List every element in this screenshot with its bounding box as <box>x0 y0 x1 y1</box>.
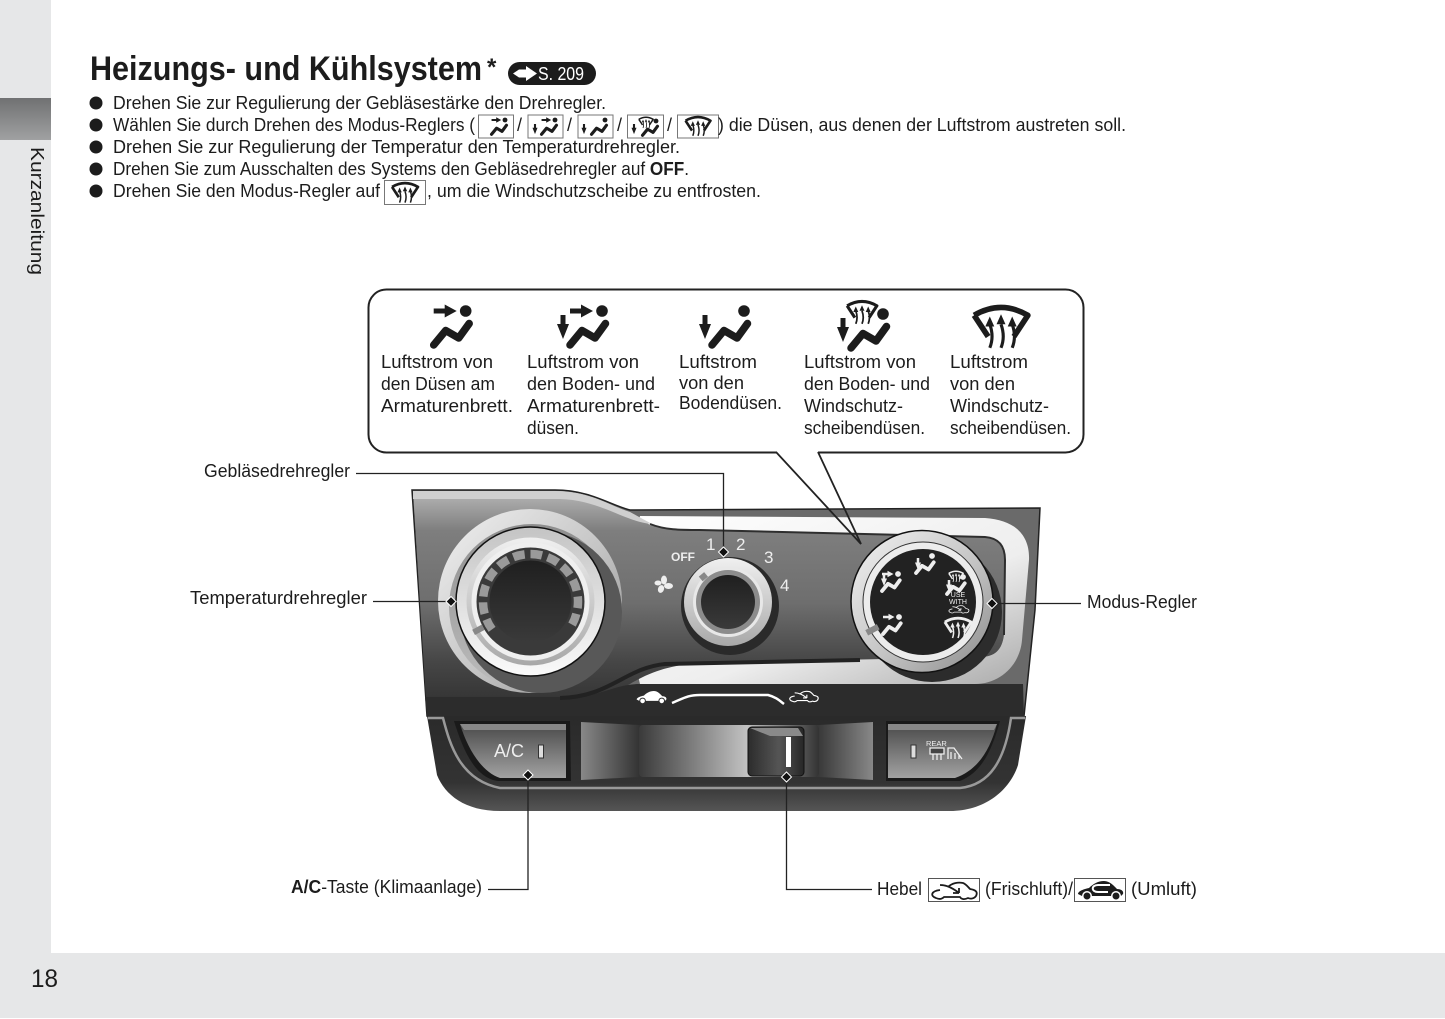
panel body <box>412 490 1040 716</box>
label: temperature dial <box>190 588 456 608</box>
mode text 5: scheibendüsen. <box>950 418 1071 438</box>
mode text 3: von den <box>679 373 744 393</box>
bullet list: Wählen Sie durch Drehen des Modus-Reglers ( <box>113 115 475 135</box>
mode text 5: Windschutz- <box>950 396 1049 416</box>
top left highlight <box>413 491 652 524</box>
bottom band <box>0 953 1445 1018</box>
mode text 4: Luftstrom von <box>804 352 916 372</box>
mode text 4: Windschutz- <box>804 396 903 416</box>
small icon: defrost <box>678 115 718 138</box>
mode icon: floor and dashboard <box>557 304 608 345</box>
page reference pill <box>508 62 596 85</box>
blower speed labels: OFF <box>671 550 695 564</box>
title: * <box>487 54 497 81</box>
white trim strip <box>620 516 1029 684</box>
mode text 2 <box>527 352 660 438</box>
blower speed labels: 2 <box>736 535 745 554</box>
blower speed labels <box>671 535 789 595</box>
dial icons <box>881 553 971 638</box>
mode text 4: den Boden- und <box>804 374 930 394</box>
callout tail <box>776 450 861 544</box>
mode text 4 <box>804 352 930 438</box>
bullet list: / <box>567 115 572 135</box>
dial icons: USE <box>951 592 966 599</box>
bullet list: Drehen Sie den Modus-Regler auf <box>113 181 381 201</box>
icon: fresh air <box>928 878 980 902</box>
label: temperature dial: Temperaturdrehregler <box>190 588 367 608</box>
mode text 4: scheibendüsen. <box>804 418 925 438</box>
label: mode dial <box>987 592 1197 612</box>
mode icon: dashboard <box>434 304 472 345</box>
small icon: floor and windshield vents <box>628 115 664 138</box>
A/C button <box>454 721 571 781</box>
left sidebar <box>0 0 51 1018</box>
blower speed labels: 4 <box>780 576 789 595</box>
rear defrost button: REAR <box>926 739 947 748</box>
blower speed labels: 3 <box>764 548 773 567</box>
bullet list: ) die Düsen, aus denen der Luftstrom austreten soll. <box>718 115 1126 135</box>
title: Heizungs- und Kühlsystem <box>90 50 482 88</box>
label: blower dial: Gebläsedrehregler <box>204 461 350 481</box>
sidebar label: Kurzanleitung <box>27 147 47 275</box>
mode text 5 <box>950 352 1071 438</box>
label: A/C button <box>291 770 533 897</box>
mode text 1: Armaturenbrett. <box>381 396 513 416</box>
A/C button: A/C <box>494 741 524 761</box>
air source scale <box>637 691 818 704</box>
label: A/C button: A/C-Taste (Klimaanlage) <box>291 877 482 897</box>
recess top edge <box>650 524 1005 635</box>
icon: recirculated air <box>1074 878 1126 902</box>
bullet list: Drehen Sie zur Regulierung der Temperatur den Temperaturdrehregler. <box>113 137 680 157</box>
mode icon: windshield <box>974 307 1028 348</box>
mode text 5: Luftstrom <box>950 352 1028 372</box>
mode text 1: Luftstrom von <box>381 352 493 372</box>
mode icon: floor <box>699 305 750 345</box>
mode text 3: Luftstrom <box>679 352 757 372</box>
climate control panel <box>412 490 1040 811</box>
bullet list: Drehen Sie zur Regulierung der Gebläsestärke den Drehregler. <box>113 93 606 113</box>
mode text 1 <box>381 352 513 416</box>
bullet list <box>90 93 1126 204</box>
label: air source lever: (Umluft) <box>1131 879 1197 899</box>
callout panel: airflow modes <box>368 290 1084 452</box>
bullet list: Drehen Sie zum Ausschalten des Systems den Gebläsedrehregler auf OFF. <box>113 159 689 179</box>
small icon: defrost inline <box>384 180 426 204</box>
label: mode dial: Modus-Regler <box>1087 592 1197 612</box>
label: air source lever <box>782 772 1197 902</box>
mode text 2: Luftstrom von <box>527 352 639 372</box>
air source lever <box>581 722 873 780</box>
blower dial <box>681 557 779 655</box>
bullet list: / <box>667 115 672 135</box>
mode text 2: Armaturenbrett- <box>527 396 660 416</box>
sidebar tab <box>0 98 51 140</box>
rear defrost button <box>886 721 1000 781</box>
fan icon <box>654 576 673 594</box>
bullet list: / <box>617 115 622 135</box>
small icon: floor vents <box>578 115 613 138</box>
bullet list: , um die Windschutzscheibe zu entfrosten. <box>427 181 761 201</box>
mode text 3 <box>679 352 782 413</box>
small icon: dashboard vents <box>478 115 514 138</box>
mode text 3: Bodendüsen. <box>679 393 782 413</box>
temperature dial <box>438 509 623 699</box>
mode icon: floor and windshield <box>837 301 889 348</box>
page number: 18 <box>31 965 58 993</box>
small icon: floor and dashboard vents <box>528 115 563 138</box>
label: air source lever: Hebel <box>877 879 922 899</box>
mode text 5: von den <box>950 374 1015 394</box>
bullet list: / <box>517 115 522 135</box>
label: air source lever: (Frischluft)/ <box>985 879 1073 899</box>
mode text 1: den Düsen am <box>381 374 495 394</box>
control face <box>413 491 1005 699</box>
lower panel <box>427 716 1026 811</box>
blower speed labels: 1 <box>706 535 715 554</box>
dark lower band <box>425 684 1024 716</box>
lower trim stripe <box>428 718 1025 788</box>
label: blower dial <box>204 461 728 557</box>
mode text 2: düsen. <box>527 418 579 438</box>
page reference pill: S. 209 <box>538 64 584 84</box>
mode dial <box>851 530 1002 682</box>
dial icons: WITH <box>949 599 967 606</box>
mode text 2: den Boden- und <box>527 374 655 394</box>
